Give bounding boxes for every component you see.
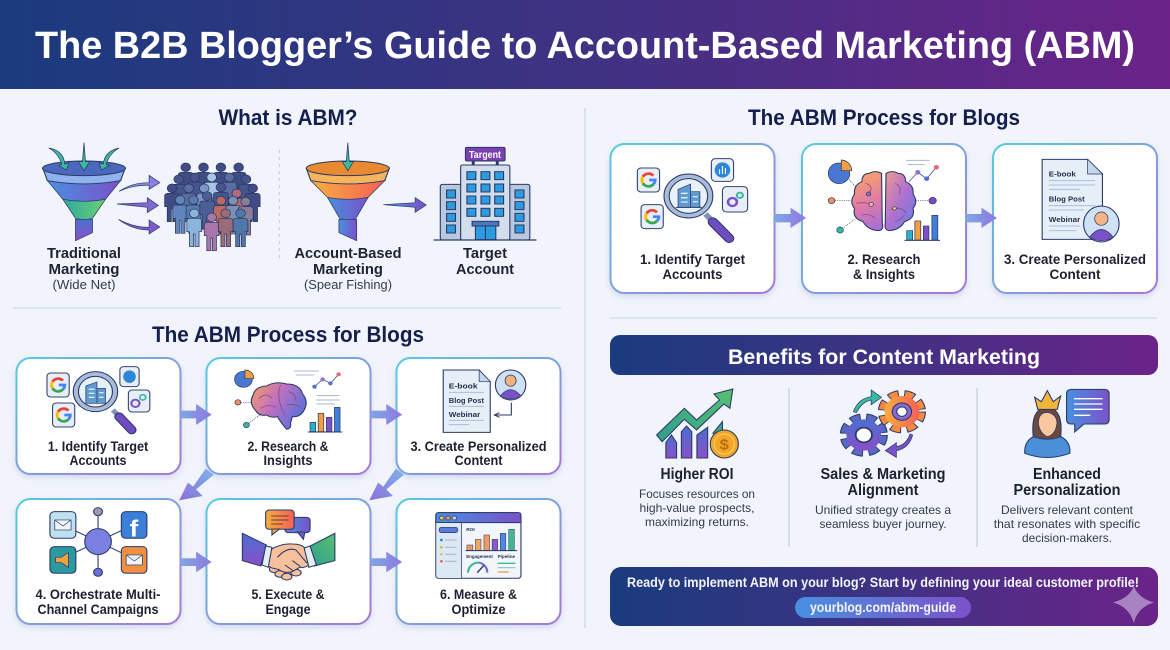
label: target account <box>456 246 514 278</box>
benefit: higher ROI <box>639 389 755 529</box>
label: target account: Target <box>463 246 507 262</box>
card: identify target accounts <box>610 144 774 293</box>
panel: what is ABM <box>43 105 537 292</box>
benefit: enhanced personalization: decision-makers. <box>1022 531 1112 545</box>
card 6: measure and optimize: Pipeline <box>498 554 515 559</box>
card 4: orchestrate multi-channel campaigns: Channel Campaigns <box>38 602 158 617</box>
heading band: benefits <box>610 335 1158 375</box>
card: create personalized content: 3. Create Personalized <box>1004 251 1146 267</box>
panel: ABM process, six steps <box>16 322 560 624</box>
benefit: higher ROI: maximizing returns. <box>645 515 749 529</box>
benefit: enhanced personalization <box>994 389 1140 545</box>
icon: person with crown and speech bubble <box>1025 389 1109 457</box>
card: research and insights: & Insights <box>853 266 915 282</box>
cta link pill <box>795 597 971 618</box>
benefit: sales and marketing alignment: seamless buyer journey. <box>820 517 946 531</box>
card: research and insights <box>802 144 966 293</box>
label: account-based marketing <box>294 246 402 292</box>
panel: benefits for content marketing <box>610 335 1158 547</box>
label: traditional marketing: (Wide Net) <box>52 277 116 292</box>
arrow: funnel to building <box>383 198 426 212</box>
heading: process right: The ABM Process for Blogs <box>748 105 1020 130</box>
label: account-based marketing: Marketing <box>313 262 383 278</box>
icon: growth chart with coin <box>657 389 738 458</box>
heading: what is ABM: What is ABM? <box>218 105 358 130</box>
card 1: identify target accounts: 1. Identify Target <box>48 439 149 454</box>
illustration: target account building <box>434 147 536 240</box>
benefit: enhanced personalization: that resonates with specific <box>994 517 1140 531</box>
benefit: sales and marketing alignment: Sales & Marketing <box>820 466 946 483</box>
card 3: create personalized content: E-book <box>449 382 478 391</box>
arrows between six-step cards <box>179 404 404 572</box>
cta text: Ready to implement ABM on your blog? Start by defining your ideal customer profile! <box>627 575 1139 590</box>
card 6: measure and optimize: ROI <box>466 527 475 532</box>
card 6: measure and optimize: Engagement <box>466 554 493 559</box>
call to action banner <box>610 567 1158 626</box>
label: account-based marketing: (Spear Fishing) <box>304 277 392 292</box>
card: identify target accounts: Accounts <box>662 266 723 282</box>
panel: ABM process, three steps <box>610 105 1157 293</box>
card 4: orchestrate multi-channel campaigns: f <box>130 517 139 542</box>
illustration: account-based funnel <box>306 143 389 241</box>
illustration: traditional marketing funnel <box>43 143 125 241</box>
label: account-based marketing: Account-Based <box>294 246 402 262</box>
card 1: identify target accounts <box>16 358 180 474</box>
benefit: enhanced personalization: Enhanced <box>1033 466 1101 483</box>
benefit: higher ROI: Focuses resources on <box>639 487 755 501</box>
card 2: research and insights: 2. Research & <box>248 439 329 454</box>
cta link pill: yourblog.com/abm-guide <box>810 600 956 615</box>
benefit: sales and marketing alignment <box>815 390 951 531</box>
label: traditional marketing <box>47 246 121 292</box>
benefit: higher ROI: high-value prospects, <box>640 501 754 515</box>
card: create personalized content <box>993 144 1157 293</box>
card 3: create personalized content: Content <box>454 453 503 468</box>
card: create personalized content: E-book <box>1049 170 1076 178</box>
card 2: research and insights <box>206 358 370 474</box>
benefit: sales and marketing alignment: Alignment <box>848 482 918 499</box>
card: identify target accounts: 1. Identify Target <box>640 251 745 267</box>
card: research and insights: 2. Research <box>848 251 920 267</box>
main title: The B2B Blogger’s Guide to Account-Based Marketing (ABM) <box>35 25 1135 67</box>
header band <box>0 0 1170 89</box>
sign label: Targent <box>469 150 502 161</box>
label: traditional marketing: Traditional <box>47 246 121 262</box>
card 3: create personalized content: Blog Post <box>449 396 484 405</box>
benefit: higher ROI: Higher ROI <box>660 466 734 483</box>
icon: growth chart with coin: $ <box>720 437 729 453</box>
heading: process left: The ABM Process for Blogs <box>152 322 424 347</box>
illustration: crowd of people <box>165 163 260 251</box>
icon: interlocking gears <box>844 390 922 457</box>
card: create personalized content: Content <box>1050 266 1101 282</box>
card 3: create personalized content <box>396 358 560 474</box>
benefit: enhanced personalization: Delivers relevant content <box>1001 503 1134 517</box>
card 4: orchestrate multi-channel campaigns: 4. Orchestrate Multi- <box>36 587 160 602</box>
card 4: orchestrate multi-channel campaigns <box>16 499 180 624</box>
benefit: enhanced personalization: Personalization <box>1014 482 1120 499</box>
card 3: create personalized content: 3. Create Personalized <box>410 439 546 454</box>
label: target account: Account <box>456 262 514 278</box>
card 6: measure and optimize: Optimize <box>452 602 506 617</box>
card 5: execute and engage: 5. Execute & <box>252 587 325 602</box>
icon: sparkle <box>1113 586 1154 623</box>
card 1: identify target accounts: Accounts <box>70 453 126 468</box>
card 5: execute and engage <box>206 499 370 624</box>
heading band: benefits: Benefits for Content Marketing <box>728 346 1040 369</box>
benefit: sales and marketing alignment: Unified strategy creates a <box>815 503 951 517</box>
card 3: create personalized content: Webinar <box>449 410 481 419</box>
card: create personalized content: Webinar <box>1049 215 1081 224</box>
card 2: research and insights: Insights <box>264 453 312 468</box>
card 6: measure and optimize: 6. Measure & <box>440 587 517 602</box>
card 5: execute and engage: Engage <box>266 602 310 617</box>
label: traditional marketing: Marketing <box>48 262 120 278</box>
card: create personalized content: Blog Post <box>1049 195 1085 203</box>
icon: arrows to crowd <box>117 175 160 234</box>
arrows between three-step cards <box>774 208 997 228</box>
card 6: measure and optimize <box>396 499 560 624</box>
